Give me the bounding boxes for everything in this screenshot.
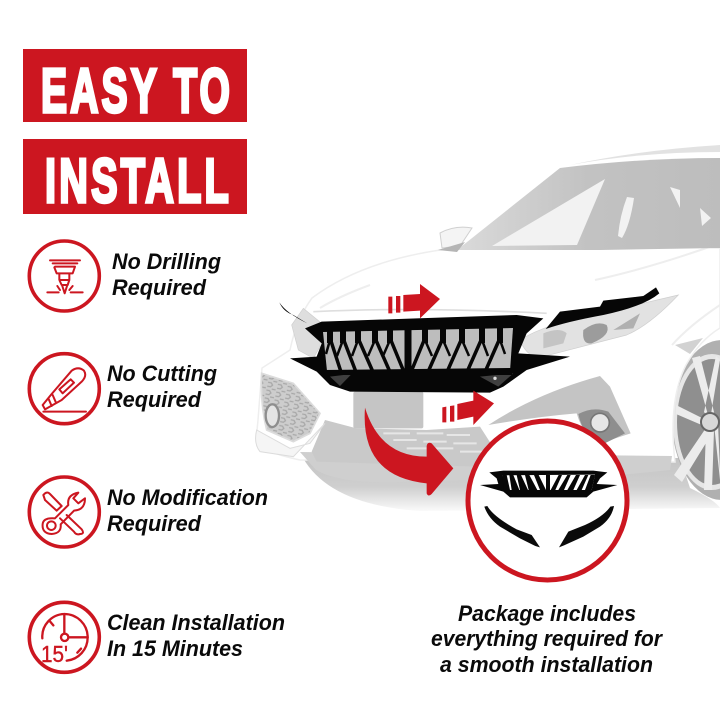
- package caption: Package includes: [458, 601, 636, 626]
- icon: stopwatch clock: [42, 614, 88, 661]
- package caption: everything required for: [431, 626, 663, 651]
- text: [107, 485, 268, 536]
- text: In 15 Minutes: [107, 636, 243, 661]
- left headlight: [292, 308, 322, 358]
- text: [107, 361, 218, 412]
- fender light: [675, 338, 703, 354]
- text: Required: [112, 275, 207, 300]
- icon: wrench and screwdriver: [43, 493, 85, 534]
- heading: install: INSTALL: [45, 147, 232, 216]
- feature: no drilling: [29, 241, 222, 311]
- under bumper: [300, 452, 672, 482]
- red curved arrow: [365, 408, 453, 496]
- text: Required: [107, 387, 202, 412]
- text: [107, 610, 285, 661]
- package caption: a smooth installation: [440, 652, 653, 677]
- ground shadow and underbody: [303, 458, 720, 511]
- package grille: [480, 471, 617, 547]
- feature: clean installation: [29, 602, 285, 672]
- right trim strip: [546, 287, 659, 329]
- right headlight: [520, 295, 678, 358]
- package circle: [468, 421, 627, 580]
- text: No Cutting: [107, 361, 218, 386]
- grille opening: [323, 328, 513, 371]
- grille frame: [279, 287, 659, 393]
- bumper panels in reference crop coordinates: [256, 295, 678, 467]
- red arrow: upper: [388, 284, 440, 318]
- feature: no cutting: [29, 354, 218, 424]
- car photo: [256, 145, 720, 511]
- text: No Drilling: [112, 249, 222, 274]
- feature: no modification: [29, 477, 268, 547]
- package trim right: [559, 506, 614, 547]
- left trim strip: [279, 302, 307, 323]
- red arrow: lower: [442, 391, 494, 425]
- heading: easy to: EASY TO: [41, 56, 233, 125]
- icon: drill: [47, 260, 83, 293]
- hood fold lines: [320, 245, 720, 345]
- grille bottom band: [323, 368, 513, 375]
- icon: utility knife: [43, 368, 86, 412]
- 15 label: 15': [41, 641, 68, 667]
- package trim left: [484, 506, 540, 547]
- text: Clean Installation: [107, 610, 285, 635]
- grille teeth: [326, 328, 505, 372]
- car body: [256, 240, 720, 462]
- wheel: [672, 340, 720, 500]
- grille assembly on car: [279, 287, 659, 393]
- package caption: [431, 601, 663, 677]
- windshield and roof: [438, 145, 720, 252]
- text: No Modification: [107, 485, 268, 510]
- text: [112, 249, 222, 300]
- text: Required: [107, 511, 202, 536]
